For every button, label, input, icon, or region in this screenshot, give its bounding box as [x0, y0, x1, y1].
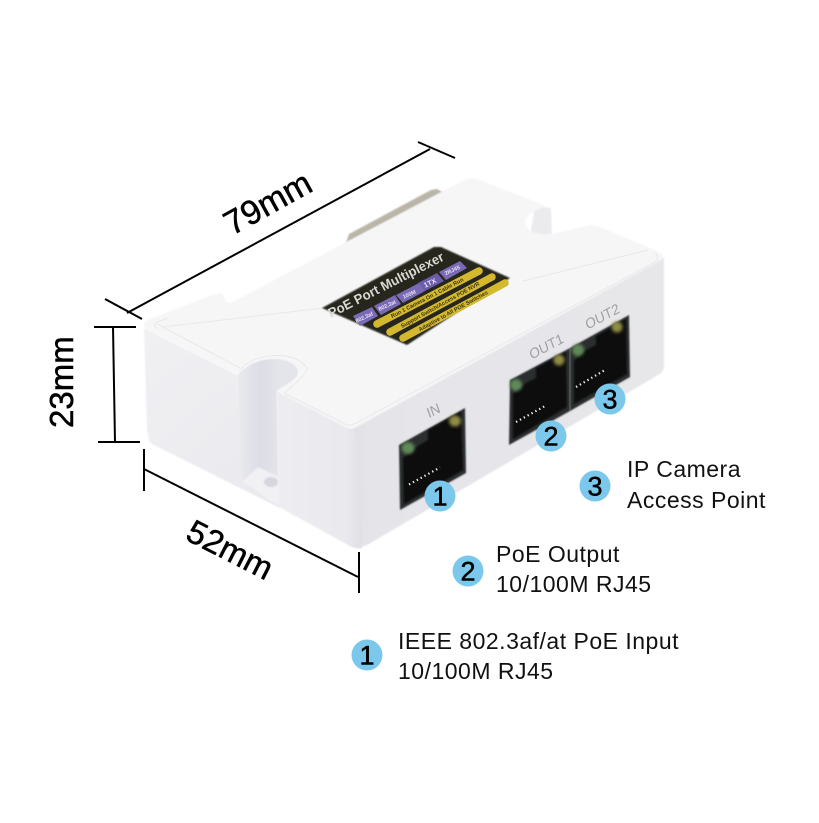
legend item 3: IP camera / access point	[580, 456, 766, 513]
badge 2 on OUT1 port	[536, 420, 566, 452]
spec tags	[353, 261, 467, 326]
port marking: OUT1: OUT1	[527, 330, 566, 363]
legend item 2: PoE output	[452, 541, 652, 597]
spec tags: 802.3at	[378, 299, 397, 313]
legend text 2: 10/100M RJ45	[496, 571, 652, 597]
legend badge 2: 2	[460, 556, 476, 586]
label title: PoE Port Multiplexer	[326, 249, 447, 321]
length label: 79mm	[217, 164, 319, 243]
front-left corner block	[277, 391, 362, 548]
RJ45 port: OUT1	[509, 348, 570, 445]
dimension: width 52mm	[144, 449, 359, 593]
length arrow line	[105, 142, 455, 319]
legend text 2: PoE Output	[496, 541, 620, 567]
rear side sliver	[530, 206, 552, 236]
spec tags: 802.3af	[355, 311, 374, 325]
pill text: Adaptive to All POE Switches	[418, 290, 489, 333]
RJ45 port: IN	[399, 408, 466, 510]
RJ45 port: OUT2	[570, 315, 630, 411]
width label: 52mm	[181, 512, 279, 587]
legend text 1: 10/100M RJ45	[398, 658, 554, 684]
rear metal connector	[346, 189, 444, 243]
legend badge 3: 3	[587, 472, 603, 502]
legend item 1: PoE input	[352, 628, 679, 684]
badge 1 on IN port	[424, 480, 456, 512]
spec tags: 1TX	[423, 278, 438, 290]
legend badge 3	[580, 470, 610, 502]
port marking: OUT2: OUT2	[583, 300, 622, 333]
legend badge 1	[352, 640, 382, 670]
legend text 1: IEEE 802.3af/at PoE Input	[398, 628, 679, 654]
legend badge 1: 1	[359, 640, 375, 670]
badge 3 on OUT2 port	[594, 384, 626, 414]
pill text: Support Switch/Access POE NVR	[400, 281, 481, 330]
mounting notch well	[237, 358, 299, 506]
badge 1 on IN port: 1	[432, 482, 448, 512]
device: PoE port multiplexer enclosure	[144, 178, 664, 548]
product label	[322, 247, 510, 345]
legend text 3: IP Camera	[627, 456, 741, 482]
yellow feature pills	[377, 271, 505, 338]
legend text 3: Access Point	[627, 487, 766, 513]
dimension: height 23mm	[43, 327, 140, 442]
dimension: length 79mm	[105, 142, 455, 319]
port marking: IN: IN	[424, 399, 442, 421]
top face	[144, 178, 663, 429]
spec tags: 100M	[402, 289, 417, 301]
spec tags: 2RJ45	[444, 265, 461, 277]
front face with ports	[347, 257, 664, 547]
height label: 23mm	[43, 336, 80, 428]
badge 2 on OUT1 port: 2	[543, 422, 559, 452]
legend badge 2	[452, 556, 484, 586]
width arrow line	[144, 449, 359, 593]
badge 3 on OUT2 port: 3	[602, 384, 618, 414]
pill text: Run 1 Camera On 1 Cable Run	[390, 277, 465, 320]
left side face	[144, 328, 280, 508]
height arrow line	[94, 327, 140, 442]
top face moulding lines	[154, 250, 657, 425]
